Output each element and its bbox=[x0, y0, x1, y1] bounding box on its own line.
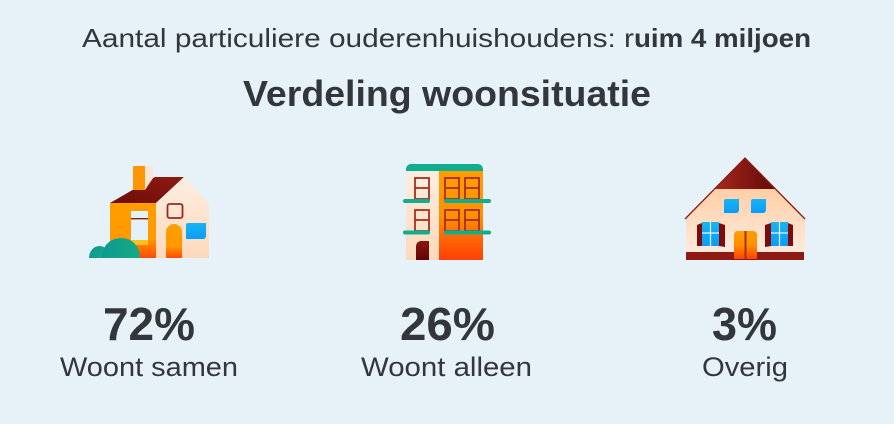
stat: woont samen: Woont samen bbox=[60, 352, 238, 382]
stat: woont alleen bbox=[361, 298, 532, 382]
stat: overig: 3% bbox=[712, 298, 777, 350]
icon: detached house with bush bbox=[89, 166, 209, 258]
stat: woont samen bbox=[60, 298, 238, 382]
stat: overig bbox=[702, 298, 788, 382]
subtitle: number of households: uim 4 miljoen bbox=[634, 23, 811, 53]
subtitle: number of households bbox=[82, 23, 811, 53]
stat: woont alleen: Woont alleen bbox=[361, 352, 532, 382]
stat: overig: Overig bbox=[702, 352, 788, 382]
stat: woont samen: 72% bbox=[103, 298, 195, 350]
icon: apartment building bbox=[403, 164, 491, 260]
subtitle: number of households: Aantal particuliere ouderenhuishoudens: r bbox=[82, 23, 634, 53]
heading: Verdeling woonsituatie bbox=[243, 73, 651, 114]
stat: woont alleen: 26% bbox=[400, 298, 495, 350]
icon: house with gabled roof bbox=[685, 158, 805, 260]
